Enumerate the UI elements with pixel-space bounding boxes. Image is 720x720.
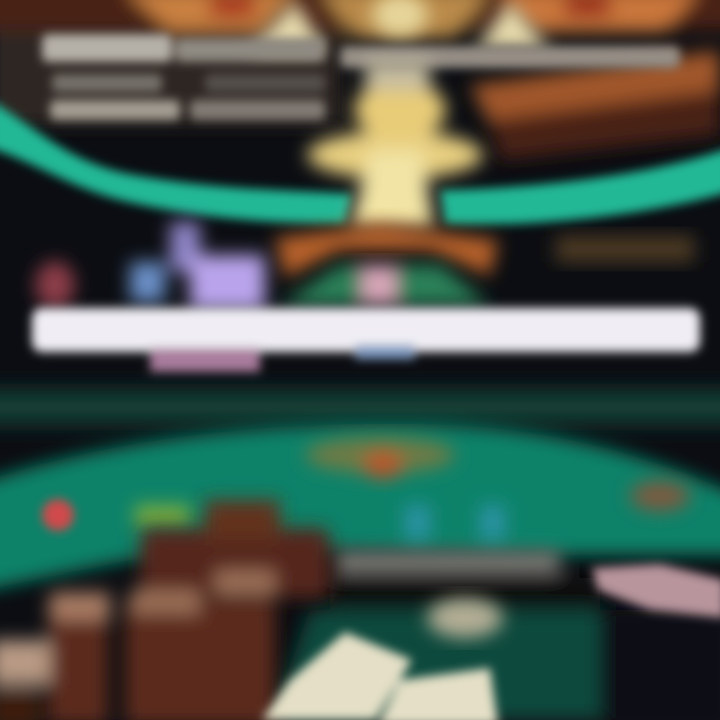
ceiling: warm top band: [0, 0, 720, 160]
chandelier top glow: [250, 0, 550, 50]
felt accents: [135, 481, 690, 540]
green table felt: [0, 424, 720, 595]
right small sign: [555, 235, 695, 263]
table back rail: [0, 392, 720, 422]
heading: blurred title lines: [42, 34, 680, 120]
white cards: [262, 632, 498, 720]
pink card: [592, 564, 720, 618]
table front rail: [270, 552, 720, 720]
teal curved band right: [440, 148, 720, 225]
felt markings: [305, 437, 455, 479]
teal curved band left: [0, 100, 352, 224]
golden chandelier: [307, 60, 483, 228]
orange band: [275, 224, 498, 278]
centre green and pink accents: [280, 265, 490, 305]
purple lights cluster: [35, 222, 265, 310]
red chip: [42, 499, 74, 531]
chip stacks: [0, 500, 330, 720]
small card: [427, 598, 503, 638]
white banner strip: [32, 308, 700, 372]
